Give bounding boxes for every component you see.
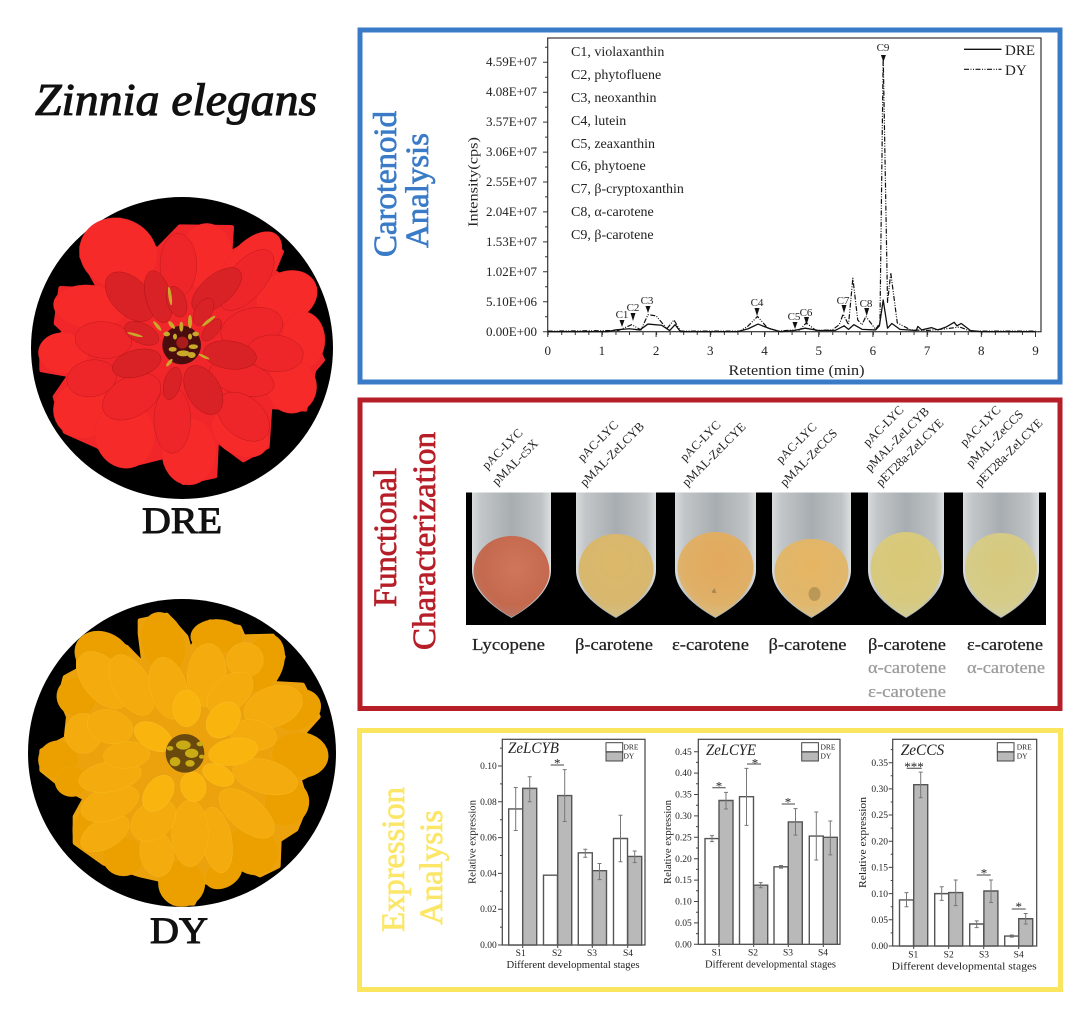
heading: functional characterization: Characterization [407, 432, 443, 650]
significance markers: * [981, 866, 987, 880]
product labels: β-carotene [575, 635, 653, 654]
legend: DRE [820, 742, 836, 752]
label: DY: DY [150, 911, 208, 952]
tube 5 mixed carotenes [868, 492, 944, 618]
compound list: C6, phytoene [571, 159, 646, 174]
peak markers [620, 55, 886, 329]
plasmid labels: pET28a-ZeLCYE [972, 416, 1046, 489]
axis labels: S2 [748, 948, 758, 958]
panel: carotenoid analysis [360, 30, 1060, 382]
flower photo: DRE red zinnia [31, 197, 333, 499]
tick labels: 0.10 [480, 762, 497, 772]
product labels: ε-carotene [672, 635, 749, 654]
product labels [472, 635, 1045, 701]
plasmid labels: pMAL-c5X [489, 436, 541, 488]
title: Zinnia elegans [35, 75, 317, 125]
axis labels: Different developmental stages [506, 960, 640, 971]
y axis tick labels: 2.55E+07 [486, 174, 537, 189]
product labels: β-carotene [868, 635, 946, 654]
y axis tick labels: 1.02E+07 [486, 264, 537, 279]
plasmid labels: pAC-LYC [479, 426, 526, 472]
tube 3 epsilon-carotene [675, 492, 756, 618]
compound list: C4, lutein [571, 114, 626, 129]
tick labels: 0.15 [675, 876, 692, 886]
axis labels: S4 [818, 948, 828, 958]
heading: carotenoid analysis: Carotenoid [368, 110, 404, 257]
tick labels: 0.10 [675, 898, 692, 908]
axis labels: S3 [587, 949, 597, 959]
tick labels: 0.45 [675, 748, 692, 758]
x axis tick labels: 5 [815, 343, 822, 358]
plasmid labels: pAC-LYC [677, 418, 724, 464]
product labels: ε-carotene [967, 635, 1043, 654]
gene name: ZeLCYB [508, 740, 559, 757]
legend: DRE [1017, 742, 1032, 752]
y axis tick labels: 4.59E+07 [486, 54, 537, 69]
plasmid labels: pMAL-ZeCCS [963, 407, 1026, 470]
product labels: α-carotene [967, 658, 1045, 677]
tick labels [675, 748, 692, 950]
compound list: C1, violaxanthin [571, 45, 664, 60]
significance marker: * [554, 756, 561, 770]
axis labels: Relative expression [857, 796, 869, 888]
bar chart: ZeLCYE [663, 739, 840, 970]
tick labels: 0.04 [480, 870, 497, 880]
plasmid labels: pMAL-ZeCCS [777, 426, 840, 489]
flower photo: DY yellow zinnia [28, 599, 336, 907]
panel: functional characterization [360, 400, 1060, 708]
significance markers: * [785, 794, 791, 810]
y axis tick labels [486, 54, 537, 339]
significance marker [551, 756, 564, 770]
compound list: C8, α-carotene [571, 205, 654, 220]
y axis tick labels: 4.08E+07 [486, 84, 537, 99]
chromatogram chart [466, 38, 1041, 379]
axis labels: Relative expression [468, 799, 479, 884]
axis labels: S1 [908, 950, 919, 960]
compound list [571, 45, 684, 243]
bars [900, 772, 1033, 946]
tick labels: 0.20 [675, 855, 692, 865]
y axis tick labels: 5.10E+06 [486, 294, 537, 309]
compound list: C7, β-cryptoxanthin [571, 182, 684, 197]
peak labels: C2 [627, 302, 639, 314]
plasmid labels: pMAL-ZeLCYB [862, 404, 932, 474]
tick labels: 0.00 [871, 942, 888, 952]
heading: expression analysis: Expression [376, 787, 412, 932]
tick labels: 0.25 [675, 834, 692, 844]
x axis tick labels: 1 [599, 343, 605, 358]
bar chart: ZeLCYB [468, 739, 645, 971]
tick labels: 0.25 [871, 811, 888, 821]
peak labels: C9 [877, 42, 890, 54]
y axis tick labels: 2.04E+07 [486, 204, 537, 219]
legend: DRE [624, 742, 639, 752]
x axis tick labels: 9 [1032, 343, 1039, 358]
axis labels: S1 [712, 948, 722, 958]
significance markers: * [716, 778, 722, 794]
panel: expression analysis [360, 730, 1060, 990]
tube 4 beta-carotene [772, 492, 851, 618]
tick labels: 0.40 [675, 769, 692, 779]
x axis tick labels: 7 [924, 343, 931, 358]
axis labels [857, 796, 1037, 972]
plasmid labels: pMAL-ZeLCYB [577, 419, 647, 489]
product labels: ε-carotene [868, 682, 946, 701]
axis title: intensity: Intensity(cps) [466, 137, 482, 227]
tick labels: 0.00 [480, 941, 497, 951]
peak labels: C6 [800, 307, 813, 319]
photo: culture tubes [466, 492, 1046, 625]
tick labels: 0.05 [871, 916, 888, 926]
bars [509, 770, 642, 945]
tick labels: 0.30 [871, 785, 888, 795]
axis labels: S3 [979, 950, 989, 960]
tick labels: 0.15 [871, 864, 888, 874]
tick labels: 0.20 [871, 838, 888, 848]
compound list: C2, phytofluene [571, 68, 661, 83]
axis title: retention time: Retention time (min) [728, 363, 865, 379]
x axis tick labels: 0 [544, 343, 551, 358]
x axis tick labels: 4 [761, 343, 768, 358]
plasmid labels: pAC-LYC [957, 403, 1004, 449]
tick labels [480, 762, 497, 951]
x axis tick labels: 3 [707, 343, 714, 358]
heading: functional characterization: Functional [368, 468, 404, 607]
peak labels: C1 [616, 309, 628, 321]
compound list: C9, β-carotene [571, 228, 654, 243]
x axis tick labels [544, 343, 1039, 358]
legend [606, 742, 639, 761]
plasmid labels: pAC-LYC [773, 420, 820, 466]
chart legend [964, 43, 1035, 79]
significance markers [712, 756, 795, 810]
heading: expression analysis: Analysis [414, 810, 450, 925]
y axis tick labels: 3.06E+07 [486, 144, 537, 159]
product labels: Lycopene [472, 635, 545, 654]
significance markers: * [1015, 899, 1022, 914]
axis labels: S2 [552, 949, 562, 959]
y axis tick labels: 0.00E+00 [486, 324, 537, 339]
tick labels: 0.08 [480, 798, 497, 808]
x axis tick labels: 8 [978, 343, 985, 358]
heading: expression analysis [376, 787, 450, 932]
gene name: ZeCCS [901, 742, 944, 759]
y axis tick labels: 3.57E+07 [486, 114, 537, 129]
heading: carotenoid analysis: Analysis [400, 133, 436, 248]
axis labels [468, 799, 640, 971]
plasmid labels: pAC-LYC [860, 403, 907, 449]
axis labels: Different developmental stages [892, 960, 1037, 972]
compound list: C5, zeaxanthin [571, 137, 655, 152]
axis labels [663, 799, 836, 970]
significance markers: * [752, 756, 758, 770]
plasmid labels: pAC-LYC [575, 418, 621, 464]
tick labels: 0.35 [675, 790, 692, 800]
axis labels: S4 [1014, 950, 1024, 960]
peak labels: C7 [837, 295, 850, 307]
tube 1 lycopene [472, 492, 551, 618]
peak labels: C3 [641, 295, 654, 307]
tick labels: 0.10 [871, 890, 888, 900]
bar chart: ZeCCS [857, 739, 1037, 972]
x axis tick labels: 2 [653, 343, 659, 358]
axis labels: S4 [623, 949, 633, 959]
heading: functional characterization [368, 432, 443, 650]
label: DRE: DRE [142, 501, 222, 542]
gene name: ZeLCYE [706, 742, 756, 759]
heading: carotenoid analysis [368, 110, 436, 257]
peak labels: C5 [788, 311, 801, 323]
significance markers [904, 759, 1026, 914]
plasmid labels [479, 403, 1046, 489]
y axis tick labels: 1.53E+07 [486, 234, 537, 249]
peak labels [616, 42, 890, 323]
bars [705, 768, 837, 944]
peak labels: C8 [860, 298, 873, 310]
legend: DY [624, 752, 635, 760]
tick labels: 0.02 [480, 905, 497, 915]
axis labels: Relative expression [663, 799, 674, 884]
tick labels: 0.00 [675, 940, 692, 950]
tube 2 beta-carotene [576, 492, 656, 618]
tick labels: 0.05 [675, 919, 692, 929]
chart legend: DRE [1005, 43, 1035, 59]
chart legend: DY [1005, 63, 1027, 79]
compound list: C3, neoxanthin [571, 91, 657, 106]
legend: DY [1017, 752, 1028, 760]
tick labels: 0.30 [675, 812, 692, 822]
tick labels: 0.35 [871, 759, 888, 769]
chromatogram traces [548, 55, 1036, 332]
axis labels: Different developmental stages [705, 959, 836, 970]
plasmid labels: pET28a-ZeLCYE [873, 416, 947, 489]
axis labels: S3 [783, 948, 793, 958]
x axis tick labels: 6 [870, 343, 877, 358]
product labels: β-carotene [768, 635, 846, 654]
axis labels: S2 [944, 950, 954, 960]
legend: DY [820, 752, 832, 760]
legend [997, 742, 1032, 761]
legend [802, 742, 836, 761]
tick labels: 0.06 [480, 834, 497, 844]
product labels: α-carotene [868, 658, 946, 677]
tick labels [871, 759, 888, 952]
peak labels: C4 [751, 297, 764, 309]
plasmid labels: pMAL-ZeLCYE [679, 420, 749, 489]
tube 6 mixed carotenes [963, 492, 1039, 618]
significance markers: *** [904, 759, 924, 774]
axis labels: S1 [516, 949, 526, 959]
